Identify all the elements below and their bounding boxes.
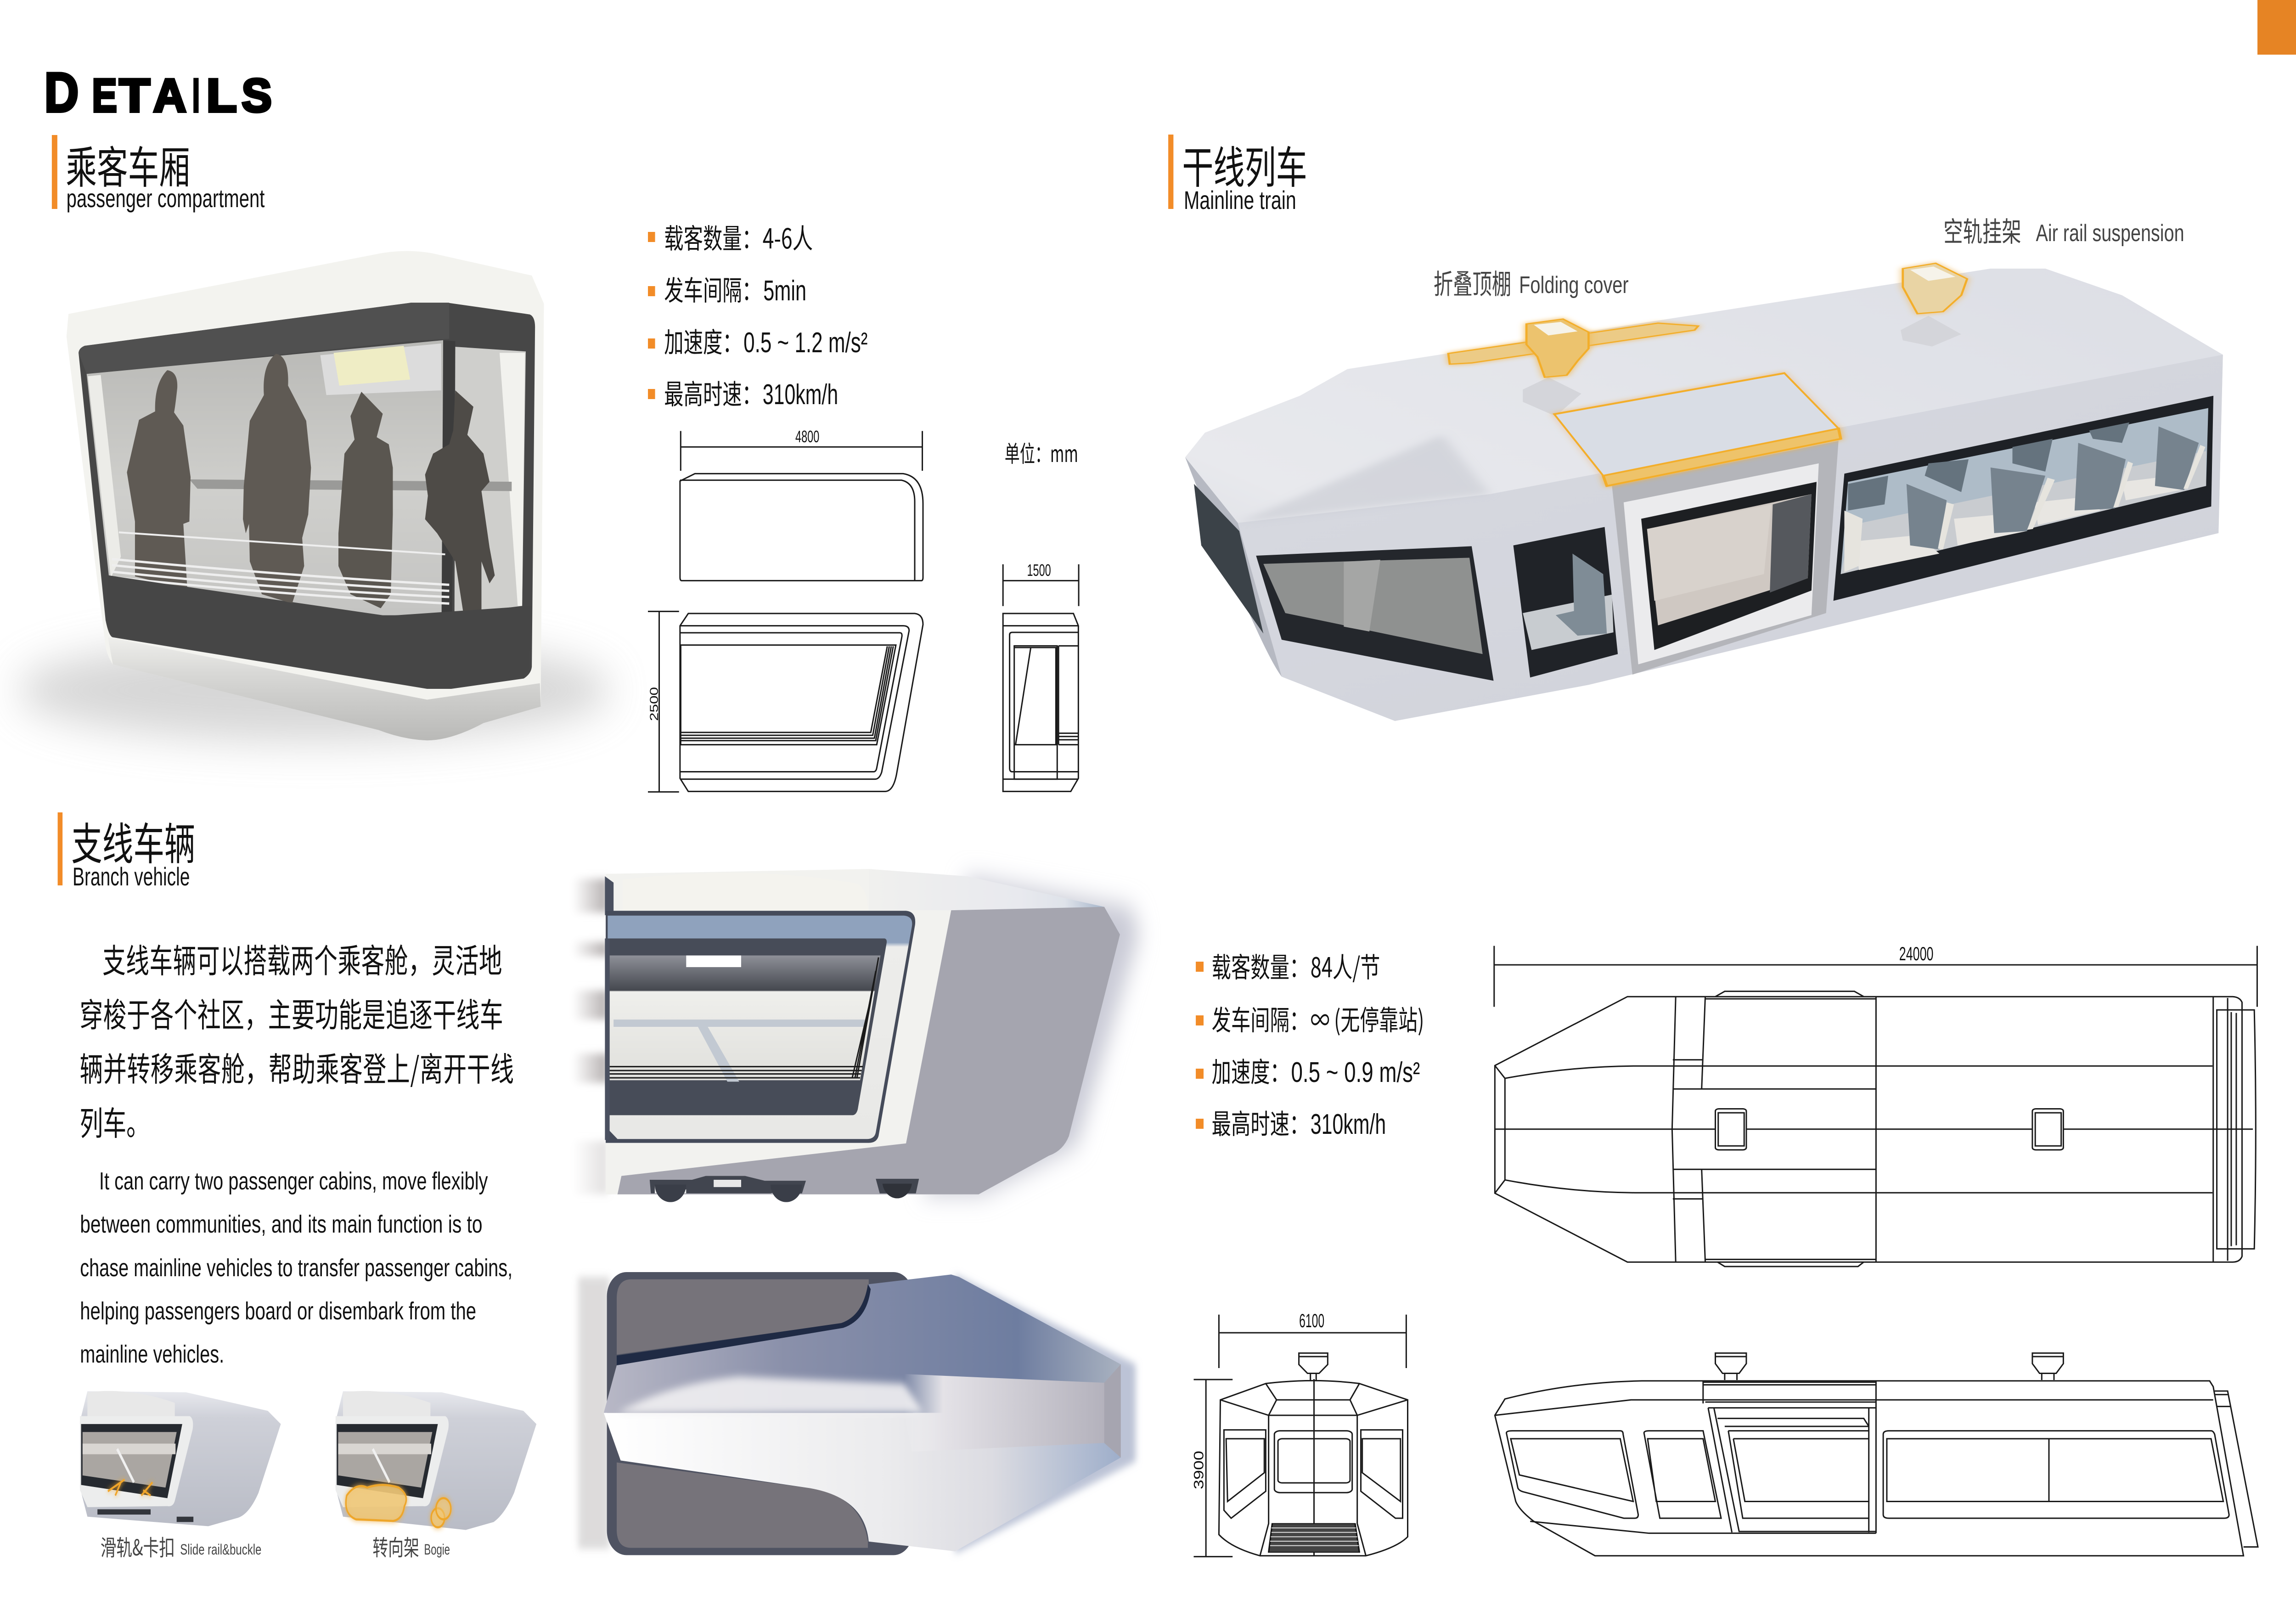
unit note: 单位：mm (1005, 436, 1078, 469)
nose ridge (904, 1364, 1121, 1458)
cabin left glass layers (88, 375, 121, 578)
title: Details: S (242, 69, 272, 122)
text block: branch vehicle English description (80, 1167, 512, 1368)
caption: bogie: 转向架 (372, 1530, 419, 1562)
text block: branch vehicle Chinese description: 支线车辆可以搭载两个乘客舱，灵活地 (102, 935, 502, 982)
list: mainline train specs: 载客数量： (1212, 946, 1309, 985)
callout: air rail suspension: Air rail suspension (2036, 220, 2184, 247)
cabin frame highlight (79, 303, 449, 374)
lower dark panel (617, 1462, 868, 1548)
train roof (1185, 269, 2223, 721)
title: Details (45, 61, 272, 124)
rear post lower (605, 939, 610, 1140)
title: Details: T (119, 69, 150, 122)
roof lid (623, 873, 868, 912)
heading: mainline train: 干线列车 (1182, 132, 1307, 196)
upper nose tint (869, 869, 1120, 935)
rear wheel (876, 1179, 919, 1198)
title: Details: D (45, 61, 79, 124)
text block: branch vehicle English description: between communities, and its main function is to (80, 1210, 483, 1238)
title: Details: A (153, 69, 186, 122)
list: mainline train specs: 310km/h (1311, 1109, 1386, 1140)
panel: branch vehicle side view (572, 869, 1140, 1202)
text block: branch vehicle English description: mainline vehicles. (80, 1340, 224, 1368)
text block: branch vehicle Chinese description (80, 935, 514, 1145)
list: passenger compartment specs: 310km/h (763, 379, 838, 411)
caption: bogie (372, 1530, 450, 1562)
caption: slide rail and buckle (101, 1530, 261, 1562)
center band blur (618, 1376, 924, 1413)
train side (1238, 355, 2223, 721)
silhouette: person 4 (425, 390, 495, 613)
text block: branch vehicle Chinese description: 列车。 (80, 1097, 150, 1145)
list: passenger compartment specs: 载客数量： (664, 217, 761, 256)
title: Details: L (206, 69, 237, 122)
grey side panel (618, 907, 1120, 1194)
text block: branch vehicle English description: helping passengers board or disembark from the (80, 1297, 476, 1325)
dimension: 4800: 4800 (795, 428, 819, 446)
suspension 1 highlighted (1526, 319, 1588, 377)
list: mainline train specs: 发车间隔： (1212, 998, 1309, 1038)
cabin end panel (500, 353, 525, 606)
dimension: 3900: 3900 (1191, 1451, 1206, 1489)
silhouette: person 1 (127, 370, 191, 590)
callout: air rail suspension: 空轨挂架 (1943, 210, 2021, 249)
corner tab (2257, 0, 2296, 55)
body lower half (604, 1413, 1121, 1551)
list: passenger compartment specs: 0.5 ~ 1.2 m/s² (743, 327, 867, 359)
drawing: cabin front view (648, 611, 923, 792)
nose tip (1104, 1364, 1121, 1458)
rear blur (578, 1277, 610, 1549)
motion blur at rear (572, 879, 608, 1194)
window 2 with seat (1514, 527, 1618, 677)
window 1 (1256, 546, 1494, 681)
heading: passenger compartment: 乘客车厢 (66, 132, 190, 196)
callout: folding cover: 折叠顶棚 (1434, 262, 1511, 302)
list: passenger compartment specs: 5min (763, 275, 806, 307)
drawing: cabin top view (680, 431, 923, 580)
title: Details: E (92, 69, 117, 122)
list: mainline train specs: 84人/节 (1311, 946, 1380, 985)
list: mainline train specs (1196, 946, 1424, 1142)
list: passenger compartment specs: 加速度： (664, 321, 742, 360)
text block: branch vehicle English description: It can carry two passenger cabins, move flexibly (99, 1167, 488, 1195)
drawing: train side view (1495, 1353, 2258, 1556)
list: passenger compartment specs: 最高时速： (664, 372, 761, 412)
folding cover rail (1448, 323, 1698, 364)
dimension: 6100: 6100 (1299, 1310, 1324, 1331)
floor rail stripes (112, 532, 449, 603)
heading: passenger compartment: passenger compartment (67, 184, 265, 213)
dimension: 24000: 24000 (1899, 943, 1934, 964)
list: mainline train specs: ∞ (无停靠站) (1311, 998, 1424, 1038)
silhouette: person 3 (338, 392, 393, 608)
heading: branch vehicle: 支线车辆 (71, 809, 195, 873)
glass stripes (610, 958, 878, 1078)
callout: folding cover (1434, 262, 1629, 302)
text block: branch vehicle Chinese description: 辆并转移乘客舱，帮助乘客登上/离开干线 (80, 1043, 514, 1091)
body upper half (604, 1274, 1121, 1413)
dark base (607, 1272, 913, 1555)
heading: branch vehicle: Branch vehicle (73, 862, 190, 891)
train front face (1185, 457, 1282, 676)
cabin dark frame (79, 303, 535, 689)
drawing: train top view (1494, 946, 2257, 1267)
rear post (605, 876, 613, 915)
text block: branch vehicle English description: chase mainline vehicles to transfer passenger cabins, (80, 1254, 512, 1282)
list: passenger compartment specs: 4-6人 (763, 217, 813, 256)
heading: mainline train: Mainline train (1184, 186, 1296, 215)
heading: mainline train (1168, 132, 1307, 215)
grille (1269, 1524, 1359, 1552)
dimension: 1500: 1500 (1027, 561, 1051, 580)
list: passenger compartment specs: 发车间隔： (664, 269, 761, 308)
callout: folding cover: Folding cover (1519, 271, 1629, 299)
suspension 2 highlighted (1903, 263, 1967, 314)
upper dark panel (617, 1279, 869, 1355)
suspension bases (1523, 316, 1961, 416)
navy gap line (617, 1284, 871, 1365)
drawing: cabin side view (1003, 564, 1079, 791)
list: mainline train specs: 加速度： (1212, 1050, 1289, 1090)
drawing: train front view (1193, 1315, 1408, 1557)
list: mainline train specs: 最高时速： (1212, 1102, 1309, 1142)
panel: passenger cabin render (16, 251, 613, 742)
dimension: 2500: 2500 (647, 687, 661, 721)
heading: branch vehicle (58, 809, 195, 891)
front window (1194, 484, 1263, 634)
cabin window glass (87, 340, 443, 615)
cabin frame outline (606, 911, 915, 1143)
interior rail (613, 1020, 865, 1082)
caption: bogie: Bogie (424, 1541, 450, 1558)
heading: passenger compartment (52, 132, 265, 213)
interior rail (189, 479, 512, 491)
title: Details: I (192, 69, 200, 122)
text block: branch vehicle Chinese description: 穿梭于各个社区，主要功能是追逐干线车 (80, 989, 503, 1036)
silhouette: person 2 (243, 354, 311, 603)
ceiling lamp (321, 344, 441, 395)
cabin shell (67, 251, 544, 740)
body (606, 869, 1120, 1194)
blurred edges (955, 1274, 1136, 1554)
window glass (610, 956, 880, 1080)
cabin bottom panel (106, 575, 532, 688)
long window with seats (1834, 396, 2213, 601)
thumbnail: slide rail and buckle (80, 1391, 281, 1526)
cabin lower shell (108, 637, 540, 740)
caption: slide rail and buckle: 滑轨&卡扣 (101, 1530, 175, 1562)
list: mainline train specs: 0.5 ~ 0.9 m/s² (1291, 1057, 1420, 1088)
list: passenger compartment specs (648, 217, 867, 412)
callout: air rail suspension (1943, 210, 2184, 249)
window frame (608, 939, 887, 1115)
caption: slide rail and buckle: Slide rail&buckle (180, 1541, 261, 1558)
soft glow around nose (924, 876, 1140, 1194)
roof front highlight (1238, 435, 1490, 523)
thumbnail: bogie (336, 1391, 536, 1530)
bogie (650, 1176, 806, 1202)
door (1612, 441, 1839, 675)
interior lamp (686, 956, 741, 967)
panel: branch vehicle top view (578, 1272, 1136, 1555)
cabin ground shadow (16, 639, 613, 742)
cabin door pillar (442, 340, 455, 615)
cabin panel (608, 916, 912, 1139)
folding cover roof panel (1554, 373, 1840, 486)
cabin end window (455, 347, 526, 614)
panel: mainline train render (1185, 263, 2223, 721)
